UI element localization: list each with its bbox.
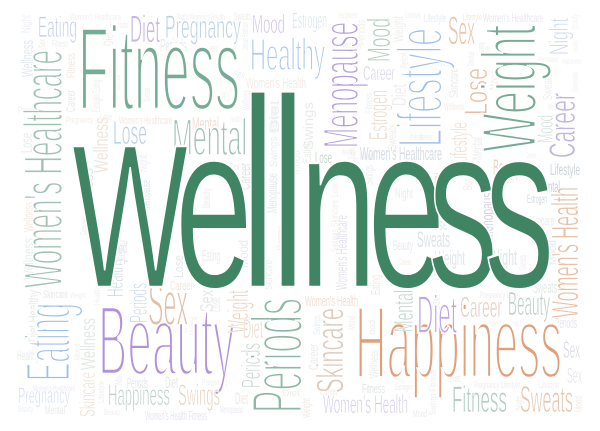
- small background words: Beauty: [201, 188, 213, 208]
- small background words: Diet: [235, 389, 248, 408]
- small background words: Women's Healthcare: [33, 384, 75, 393]
- small background words: Diet Healthy: [25, 290, 41, 342]
- word cloud: Estrogen: [527, 192, 547, 206]
- word cloud: Lose: [113, 114, 147, 151]
- small background words: Fitness: [202, 43, 218, 55]
- word cloud: Career: [460, 292, 502, 324]
- small background words: Mental: [112, 75, 123, 90]
- small background words: Wellness: [91, 117, 113, 173]
- small background words: Wellness: [20, 238, 36, 280]
- small background words: Happiness: [338, 10, 358, 20]
- small background words: Mood: [367, 320, 377, 342]
- small background words: Healthy: [340, 40, 362, 50]
- small background words: Swings: [300, 102, 316, 150]
- small background words: Lifestyle: [97, 381, 106, 403]
- small background words: Lose: [483, 46, 492, 56]
- main word: Wellness: Wellness: [72, 43, 555, 345]
- small background words: Wellness: [410, 132, 423, 142]
- small background words: Wellness: [444, 102, 464, 113]
- small background words: Women's Health: [246, 75, 306, 92]
- small background words: Night: [136, 155, 150, 172]
- small background words: Happiness: [216, 212, 247, 227]
- small background words: Fitness: [18, 105, 35, 115]
- word: Healthy (vertical): Healthy: [102, 257, 128, 297]
- word: Lose (vertical): Lose: [458, 68, 494, 115]
- word cloud: Periods: [238, 298, 318, 413]
- small background words: Menopause: [538, 55, 558, 64]
- small background words: Women's Healthcare: [334, 215, 351, 290]
- word: Career (small): Career: [363, 63, 395, 85]
- word: Skincare (lower): Skincare: [310, 308, 352, 393]
- word cloud: Lose: [315, 150, 332, 167]
- small background words: Sweats: [217, 92, 228, 108]
- small background words: Wellness: [78, 318, 100, 370]
- word cloud: Estrogen: [363, 90, 393, 140]
- small background words: Mood: [235, 240, 251, 268]
- small background words: Mood: [413, 409, 427, 420]
- small background words: Fitness: [364, 93, 375, 113]
- small background words: Eating: [113, 240, 128, 265]
- small background words: Lifestyle: [463, 12, 482, 22]
- small background words: Periods: [399, 50, 411, 68]
- word cloud: Mental: [388, 290, 419, 332]
- small background words: Mood: [114, 368, 125, 385]
- word: Skincare (lower left): Skincare: [75, 372, 100, 417]
- word cloud: Eating: [12, 303, 84, 381]
- small background words: Swings Skincare Lose: [330, 182, 341, 252]
- word cloud: Mental: [538, 179, 560, 196]
- small background words: Healthy: [93, 285, 102, 305]
- small background words: Beauty: [104, 408, 120, 417]
- small background words: Mental: [45, 403, 65, 417]
- small background words: Periods: [110, 20, 128, 30]
- small background words: Lose: [428, 215, 448, 234]
- small background words: Beauty: [476, 42, 486, 56]
- small background words: Wellness: [367, 350, 381, 378]
- small background words: Eating: [368, 275, 383, 295]
- word cloud: Mental: [172, 109, 247, 167]
- small background words: Career: [398, 257, 412, 267]
- small background words: Weight: [435, 248, 465, 270]
- small background words: Night Women's Health: [177, 12, 225, 22]
- small background words: Mental: [192, 114, 219, 134]
- small background words: Mood: [573, 396, 585, 412]
- small background words: Mood: [108, 240, 127, 257]
- small background words: Sex: [37, 39, 47, 48]
- small background words: Skincare: [528, 213, 554, 228]
- word cloud: Women's Healthcare: [360, 144, 442, 164]
- small background words: Swings: [312, 315, 323, 335]
- small background words: Swings: [361, 165, 376, 185]
- small background words: Sweats: [518, 255, 529, 270]
- small background words: Lifestyle: [539, 380, 559, 390]
- small background words: Menopause: [139, 180, 153, 210]
- small background words: Swings Fitness: [428, 370, 438, 415]
- small background words: Wellness: [420, 132, 432, 142]
- small background words: Career: [320, 387, 338, 398]
- small background words: Happiness: [268, 106, 280, 133]
- small background words: Lose: [171, 255, 186, 278]
- small background words: Beauty: [18, 404, 33, 414]
- small background words: Beauty: [460, 170, 475, 190]
- word cloud: Happiness: [108, 379, 170, 412]
- small background words: Lifestyle: [405, 10, 421, 20]
- small background words: Diet: [266, 100, 282, 133]
- small background words: Sex: [428, 298, 443, 310]
- small background words: Periods: [127, 375, 148, 392]
- small background words: Wellness: [342, 148, 356, 157]
- small background words: Women's Healthcare: [70, 12, 121, 22]
- word: Mood (top): Mood: [252, 9, 285, 39]
- small background words: Women's Healthcare: [483, 11, 543, 25]
- small background words: Eating: [300, 141, 314, 163]
- small background words: Pregnancy Lose: [480, 290, 518, 300]
- small background words: Lose: [19, 133, 36, 153]
- small background words: Sex: [230, 162, 239, 173]
- small background words: Weight: [70, 291, 86, 300]
- small background words: Mood: [547, 240, 559, 265]
- word cloud: Healthy: [250, 29, 325, 80]
- small background words: Mood: [347, 316, 358, 330]
- word cloud: Diet: [417, 285, 457, 345]
- small background words: Night: [514, 396, 524, 410]
- word: Mood (grey): Mood: [533, 115, 558, 143]
- small background words: Periods: [427, 268, 442, 278]
- small background words: Women's Health: [305, 293, 358, 310]
- small background words: Lose: [208, 297, 223, 312]
- small background words: Night: [395, 185, 413, 201]
- word cloud: Eating: [38, 11, 77, 44]
- small background words: Career: [63, 90, 78, 112]
- small background words: Skincare: [142, 88, 152, 102]
- small background words: Sweats: [494, 175, 514, 186]
- small background words: Mood: [487, 70, 501, 90]
- small background words: Wellness: [21, 202, 36, 232]
- small background words: Sweats: [385, 124, 399, 150]
- small background words: Wellness: [241, 90, 253, 110]
- small background words: Skincare: [263, 260, 275, 290]
- small background words: Career: [526, 151, 536, 160]
- small background words: Wellness: [548, 102, 564, 112]
- small background words: Pregnancy: [202, 378, 228, 387]
- small background words: Lifestyle: [424, 11, 446, 25]
- small background words: Menopause: [220, 405, 243, 416]
- small background words: Periods: [356, 20, 368, 45]
- word cloud: Sex: [148, 270, 188, 339]
- word cloud: Beauty: [98, 285, 235, 397]
- small background words: Fitness: [52, 39, 68, 50]
- small background words: Diet: [100, 32, 116, 46]
- small background words: Women's Healthcare: [119, 115, 172, 127]
- small background words: Lose: [100, 112, 112, 122]
- small background words: Career: [170, 278, 193, 293]
- small background words: Sweats: [417, 227, 450, 252]
- small background words: Pregnancy Lifestyle: [474, 380, 520, 390]
- small background words: Mood: [375, 198, 389, 210]
- small background words: Sex: [234, 69, 244, 81]
- small background words: Weight: [172, 326, 187, 335]
- word: Menopause (small vertical): Menopause: [478, 187, 497, 240]
- small background words: Sweats: [533, 278, 557, 297]
- small background words: Diet: [282, 388, 301, 398]
- small background words: Mood: [360, 149, 374, 163]
- small background words: Menopause: [264, 173, 280, 213]
- small background words: Healthy: [230, 115, 242, 124]
- small background words: Diet: [448, 373, 460, 385]
- small background words: Sweats: [234, 11, 251, 23]
- small background words: Night: [19, 15, 33, 33]
- word cloud: Diet: [243, 313, 263, 344]
- small background words: Sex: [347, 148, 358, 160]
- small background words: Mood Night: [350, 158, 360, 183]
- word cloud: Fitness: [452, 379, 507, 420]
- small background words: Night: [492, 245, 517, 270]
- word cloud: Periods: [236, 343, 266, 388]
- small background words: Weight: [301, 398, 313, 418]
- small background words: Diet: [165, 373, 178, 392]
- small background words: Happiness: [562, 57, 581, 66]
- small background words: Sweats: [570, 72, 580, 92]
- word cloud: Lifestyle: [446, 122, 473, 165]
- small background words: Estrogen: [77, 217, 93, 235]
- small background words: Mental: [469, 137, 485, 160]
- small background words: Sex: [535, 225, 548, 241]
- small background words: Beauty: [393, 237, 413, 253]
- word cloud: Diet: [130, 9, 160, 51]
- word cloud: Sex: [448, 9, 475, 53]
- small background words: Periods: [160, 36, 187, 56]
- small background words: Mental: [189, 317, 200, 335]
- word cloud: Beauty: [493, 155, 520, 180]
- small background words: Mood: [73, 344, 82, 360]
- small background words: Career Happiness: [480, 319, 536, 328]
- small background words: Eating: [202, 248, 220, 265]
- small background words: Fitness: [80, 168, 96, 210]
- small background words: Mood: [289, 150, 303, 175]
- small background words: Fitness: [64, 53, 78, 78]
- small background words: Estrogen Eating: [91, 80, 103, 112]
- small background words: Periods: [438, 59, 452, 68]
- small background words: Career: [237, 163, 254, 190]
- small background words: Fitness: [362, 381, 385, 396]
- small background words: Diet: [389, 84, 411, 106]
- word cloud: Pregnancy: [18, 383, 70, 408]
- word cloud: Women's Health: [545, 187, 587, 318]
- word cloud: Weight: [222, 290, 255, 333]
- small background words: Career: [306, 344, 321, 370]
- word cloud: Women's Health: [323, 389, 408, 419]
- small background words: Happiness: [275, 226, 287, 250]
- small background words: Women's Health Fitness: [145, 408, 207, 423]
- small background words: Wellness: [18, 40, 37, 77]
- small background words: Skincare: [446, 68, 461, 98]
- word cloud: Pregnancy: [165, 9, 241, 45]
- word: Career (vertical): Career: [542, 93, 583, 158]
- small background words: Sweats: [540, 74, 555, 100]
- word cloud: Swings: [178, 379, 220, 412]
- word cloud: Estrogen: [292, 8, 327, 33]
- small background words: Healthy: [17, 347, 39, 363]
- small background words: Mental: [466, 52, 476, 66]
- small background words: Swings: [268, 137, 280, 167]
- word cloud: Pregnancy: [430, 173, 447, 210]
- small background words: Sex: [197, 290, 217, 312]
- word cloud: Fitness: [78, 2, 240, 136]
- small background words: Skincare: [43, 289, 68, 301]
- small background words: Pregnancy: [66, 115, 93, 125]
- small background words: Estrogen: [395, 382, 413, 392]
- word cloud: Periods: [125, 283, 153, 323]
- small background words: Healthy: [571, 40, 580, 52]
